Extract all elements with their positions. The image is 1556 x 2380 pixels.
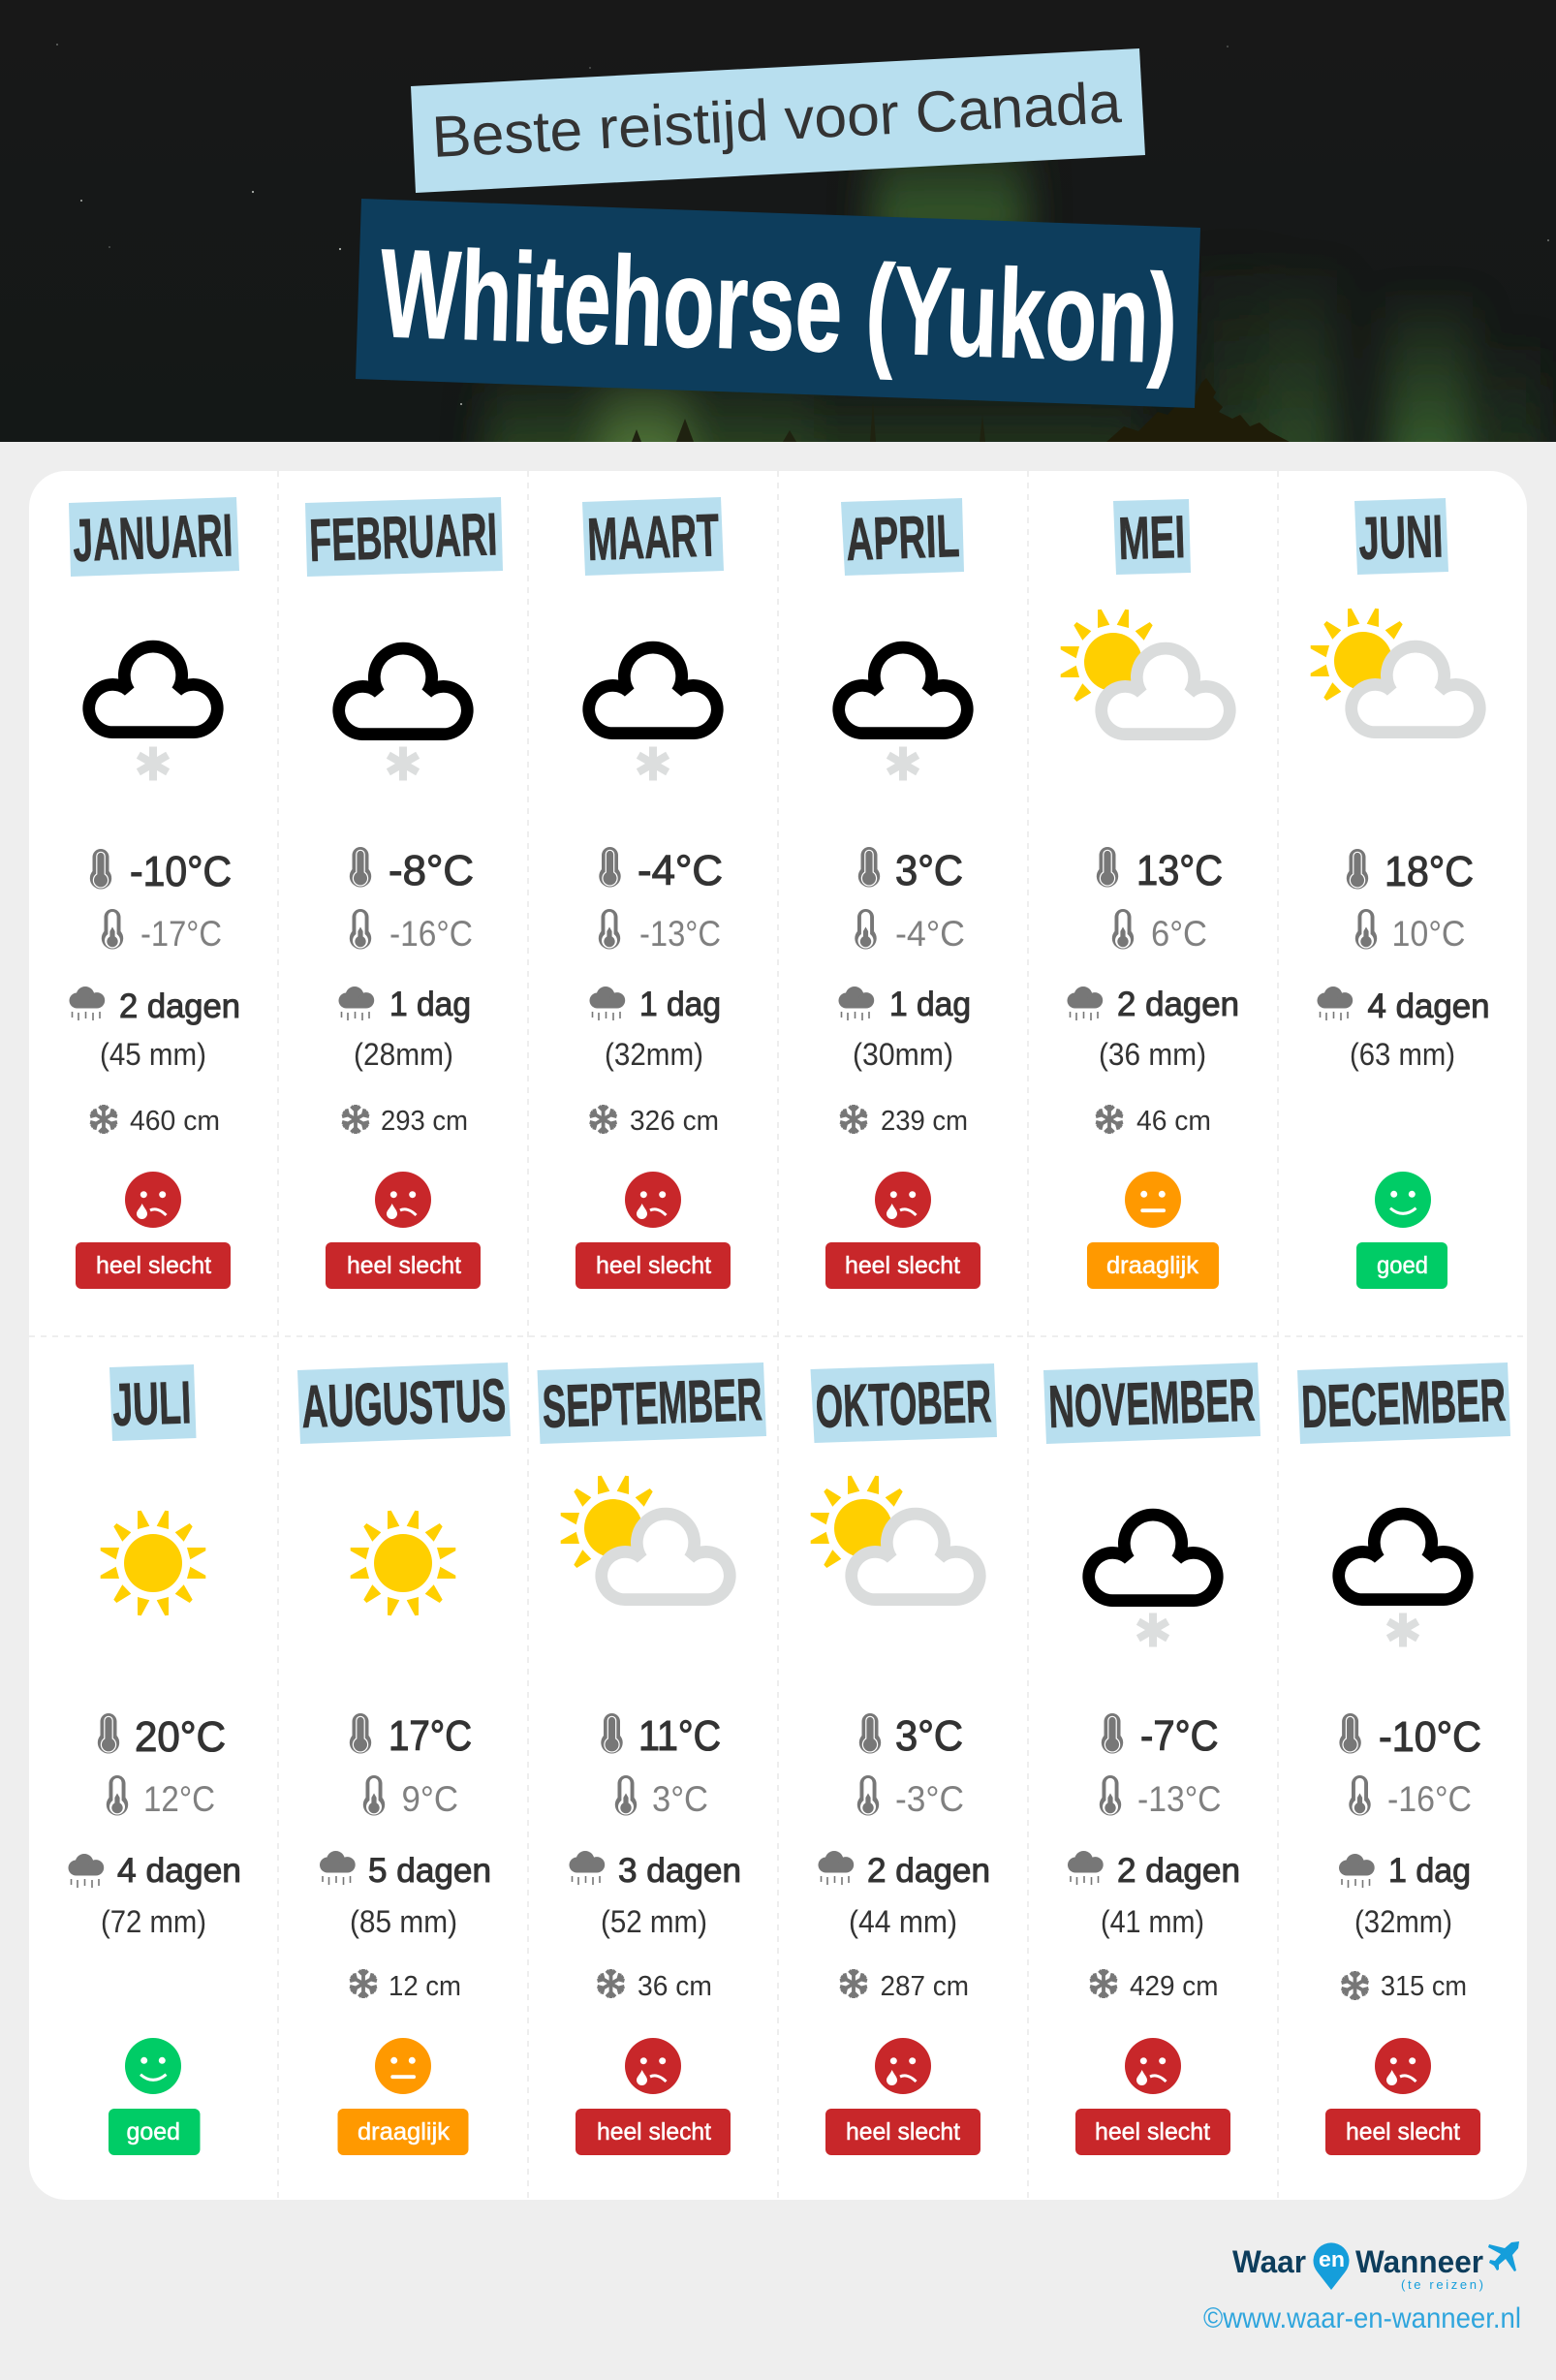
high temperature bbox=[858, 847, 963, 894]
rain days bbox=[339, 986, 471, 1023]
icon: sad face bbox=[125, 1172, 181, 1228]
snowfall: 315 cm bbox=[1381, 1971, 1467, 2002]
rainfall amount: (32mm) bbox=[605, 1037, 703, 1072]
rating badge bbox=[576, 1242, 731, 1289]
icon: sad face bbox=[375, 1172, 431, 1228]
panel: augustus bbox=[297, 1362, 511, 2155]
icon: neutral face bbox=[375, 2038, 431, 2094]
rating badge bbox=[1325, 2109, 1480, 2155]
rainfall amount: (41 mm) bbox=[1101, 1904, 1204, 1939]
rating badge: heel slecht bbox=[846, 2118, 960, 2145]
low temperature: -4°C bbox=[895, 914, 965, 954]
rain days bbox=[1318, 986, 1490, 1025]
rain days: 1 dag bbox=[639, 986, 721, 1023]
low temperature: 10°C bbox=[1391, 914, 1465, 954]
subtitle banner: Beste reistijd voor Canada bbox=[430, 70, 1123, 170]
high temperature: -10°C bbox=[1379, 1713, 1481, 1761]
icon: sun behind cloud bbox=[561, 1476, 730, 1600]
month label: FEBRUARI bbox=[308, 501, 498, 575]
icon: sun bbox=[101, 1511, 205, 1615]
low temperature bbox=[102, 909, 222, 954]
panel: mei bbox=[1061, 499, 1239, 1289]
high temperature: 20°C bbox=[135, 1713, 226, 1761]
panel: juni bbox=[1311, 498, 1490, 1289]
month label: SEPTEMBER bbox=[542, 1366, 763, 1441]
rating badge: draaglijk bbox=[358, 2118, 451, 2145]
panel: maart bbox=[576, 497, 731, 1289]
low temperature bbox=[363, 1775, 458, 1819]
high temperature bbox=[98, 1713, 226, 1761]
title banner: Whitehorse (Yukon) bbox=[378, 222, 1179, 390]
source url: ©www.waar-en-wanneer.nl bbox=[1203, 2302, 1521, 2334]
icon: sad face bbox=[625, 1172, 681, 1228]
rating badge bbox=[109, 2109, 200, 2155]
rainfall amount: (63 mm) bbox=[1350, 1037, 1455, 1072]
rain days: 1 dag bbox=[1388, 1852, 1471, 1890]
snowfall: 460 cm bbox=[130, 1106, 220, 1137]
snowfall bbox=[1095, 1105, 1211, 1137]
low temperature: -16°C bbox=[1387, 1779, 1472, 1819]
month label bbox=[109, 1364, 196, 1441]
month label: MAART bbox=[586, 502, 720, 574]
icon: happy face bbox=[1375, 1172, 1431, 1228]
rain days: 2 dagen bbox=[1117, 1852, 1240, 1890]
rain days: 2 dagen bbox=[119, 987, 240, 1025]
logo: Waar en Wanneer: Waar bbox=[1232, 2244, 1306, 2279]
rainfall amount: (30mm) bbox=[853, 1037, 953, 1072]
high temperature: 3°C bbox=[895, 1712, 963, 1760]
rain days bbox=[818, 1851, 990, 1890]
snowfall bbox=[1340, 1971, 1467, 2002]
rating badge bbox=[576, 2109, 731, 2155]
panel: december bbox=[1297, 1362, 1510, 2155]
month label bbox=[297, 1362, 511, 1444]
rain days bbox=[320, 1851, 491, 1890]
month label bbox=[305, 497, 503, 577]
snowfall: 12 cm bbox=[389, 1971, 461, 2002]
high temperature bbox=[350, 1712, 472, 1760]
icon: sun behind cloud bbox=[1311, 609, 1479, 733]
low temperature: -3°C bbox=[895, 1779, 964, 1819]
month label bbox=[810, 1363, 997, 1443]
low temperature bbox=[107, 1775, 215, 1819]
panel: april bbox=[825, 498, 980, 1289]
high temperature bbox=[1097, 847, 1223, 894]
rating badge bbox=[1356, 1242, 1447, 1289]
low temperature: 3°C bbox=[652, 1779, 708, 1819]
rating badge: heel slecht bbox=[845, 1252, 960, 1279]
rain days: 3 dagen bbox=[618, 1852, 741, 1890]
icon: happy face bbox=[125, 2038, 181, 2094]
month label bbox=[1113, 499, 1191, 575]
logo: Waar en Wanneer: (te reizen) bbox=[1401, 2277, 1483, 2292]
icon: sad face bbox=[875, 2038, 931, 2094]
icon: snow cloud bbox=[1089, 1515, 1217, 1647]
low temperature bbox=[350, 909, 473, 954]
rain days: 1 dag bbox=[389, 986, 471, 1023]
rating badge bbox=[1075, 2109, 1230, 2155]
rating badge: goed bbox=[126, 2118, 180, 2145]
snowfall bbox=[596, 1969, 712, 2002]
rating badge: heel slecht bbox=[1095, 2118, 1210, 2145]
rain days: 4 dagen bbox=[1368, 987, 1490, 1025]
rating badge: draaglijk bbox=[1106, 1252, 1199, 1279]
high temperature bbox=[601, 1712, 721, 1760]
snowfall: 46 cm bbox=[1136, 1106, 1211, 1137]
rainfall amount: (72 mm) bbox=[101, 1904, 206, 1939]
low temperature bbox=[857, 1775, 964, 1819]
panel: oktober bbox=[810, 1363, 997, 2155]
rating badge bbox=[825, 1242, 980, 1289]
rain days bbox=[839, 986, 971, 1023]
rainfall amount: (44 mm) bbox=[849, 1904, 957, 1939]
month label: JANUARI bbox=[72, 502, 233, 575]
snowfall: 429 cm bbox=[1130, 1971, 1219, 2002]
logo: Waar en Wanneer: Wanneer bbox=[1355, 2244, 1483, 2279]
rainfall amount: (28mm) bbox=[354, 1037, 453, 1072]
panel: september bbox=[537, 1362, 766, 2155]
high temperature: -4°C bbox=[638, 847, 723, 894]
subtitle banner bbox=[411, 48, 1145, 193]
panel: november bbox=[1043, 1362, 1260, 2155]
icon: sad face bbox=[1125, 2038, 1181, 2094]
title banner bbox=[356, 199, 1200, 408]
rain days: 5 dagen bbox=[368, 1852, 491, 1890]
rating badge: heel slecht bbox=[1346, 2118, 1460, 2145]
icon: sun behind cloud bbox=[811, 1476, 980, 1600]
snowfall bbox=[89, 1105, 220, 1137]
low temperature: -16°C bbox=[389, 914, 473, 954]
month label bbox=[537, 1362, 766, 1444]
icon: snow cloud bbox=[339, 648, 467, 781]
icon: snow cloud bbox=[1339, 1514, 1467, 1647]
snowfall: 287 cm bbox=[880, 1971, 969, 2002]
rating badge bbox=[825, 2109, 980, 2155]
high temperature: 18°C bbox=[1385, 848, 1474, 895]
high temperature: -7°C bbox=[1140, 1712, 1219, 1760]
rain days bbox=[1068, 1851, 1240, 1890]
snowfall: 36 cm bbox=[638, 1971, 712, 2002]
high temperature bbox=[350, 847, 474, 894]
month label: APRIL bbox=[845, 503, 960, 574]
icon: neutral face bbox=[1125, 1172, 1181, 1228]
month label: OKTOBER bbox=[815, 1368, 992, 1441]
low temperature bbox=[615, 1775, 708, 1819]
rating badge bbox=[1087, 1242, 1219, 1289]
rating badge: heel slecht bbox=[596, 1252, 711, 1279]
month label: NOVEMBER bbox=[1047, 1367, 1256, 1441]
month label bbox=[582, 497, 724, 576]
rain days bbox=[1339, 1852, 1471, 1890]
rain days: 2 dagen bbox=[1117, 986, 1239, 1023]
rainfall amount: (36 mm) bbox=[1099, 1037, 1206, 1072]
low temperature: 9°C bbox=[401, 1779, 458, 1819]
month label bbox=[1043, 1362, 1260, 1444]
rating badge bbox=[337, 2109, 469, 2155]
icon: sad face bbox=[875, 1172, 931, 1228]
low temperature bbox=[599, 909, 721, 954]
rating badge: heel slecht bbox=[597, 2118, 711, 2145]
rain days: 2 dagen bbox=[867, 1852, 990, 1890]
month label: JUNI bbox=[1357, 503, 1444, 573]
low temperature bbox=[855, 909, 965, 954]
rainfall amount: (85 mm) bbox=[350, 1904, 457, 1939]
high temperature bbox=[859, 1712, 963, 1760]
low temperature: 6°C bbox=[1151, 914, 1207, 954]
snowfall bbox=[349, 1969, 461, 2002]
snowfall bbox=[839, 1105, 968, 1137]
high temperature: 13°C bbox=[1136, 847, 1223, 894]
high temperature bbox=[1339, 1713, 1481, 1761]
panel: juli bbox=[68, 1364, 241, 2155]
low temperature: -13°C bbox=[639, 914, 721, 954]
snowfall: 239 cm bbox=[881, 1106, 968, 1137]
rain days: 4 dagen bbox=[117, 1852, 241, 1890]
high temperature: -10°C bbox=[130, 848, 232, 895]
logo: Waar en Wanneer bbox=[1232, 2241, 1519, 2292]
rain days bbox=[70, 986, 240, 1025]
panel: januari bbox=[69, 497, 240, 1289]
high temperature: 3°C bbox=[895, 847, 963, 894]
rating badge: goed bbox=[1377, 1252, 1428, 1279]
panel: februari bbox=[305, 497, 503, 1289]
rating badge bbox=[76, 1242, 231, 1289]
logo: Waar en Wanneer: en bbox=[1319, 2247, 1345, 2271]
month label: MEI bbox=[1117, 504, 1186, 573]
snowfall bbox=[839, 1969, 969, 2002]
calendar card bbox=[29, 471, 1527, 2200]
low temperature bbox=[1112, 909, 1207, 954]
high temperature: 17°C bbox=[389, 1712, 472, 1760]
icon: sad face bbox=[625, 2038, 681, 2094]
high temperature bbox=[599, 847, 723, 894]
month label bbox=[841, 498, 964, 576]
rain days bbox=[589, 986, 721, 1023]
low temperature bbox=[1355, 909, 1465, 954]
high temperature bbox=[90, 848, 232, 895]
rain days bbox=[570, 1851, 741, 1890]
icon: snow cloud bbox=[589, 647, 717, 781]
header photo: northern lights bbox=[0, 0, 1556, 465]
rating badge: heel slecht bbox=[96, 1252, 211, 1279]
high temperature bbox=[1347, 848, 1474, 895]
month label: AUGUSTUS bbox=[300, 1367, 507, 1441]
rating badge bbox=[326, 1242, 481, 1289]
rainfall amount: (45 mm) bbox=[100, 1037, 206, 1072]
icon: snow cloud bbox=[839, 647, 967, 781]
icon: sad face bbox=[1375, 2038, 1431, 2094]
high temperature: -8°C bbox=[389, 847, 474, 894]
high temperature: 11°C bbox=[638, 1712, 721, 1760]
low temperature bbox=[1100, 1775, 1221, 1819]
snowfall bbox=[1089, 1969, 1219, 2002]
rain days: 1 dag bbox=[889, 986, 971, 1023]
snowfall: 326 cm bbox=[630, 1106, 719, 1137]
month label bbox=[1354, 498, 1448, 575]
snowfall bbox=[588, 1105, 719, 1137]
rainfall amount: (52 mm) bbox=[601, 1904, 707, 1939]
low temperature: -17°C bbox=[140, 914, 222, 954]
low temperature bbox=[1349, 1775, 1472, 1819]
icon: sun bbox=[351, 1511, 455, 1615]
snowfall: 293 cm bbox=[381, 1106, 468, 1137]
rating badge: heel slecht bbox=[347, 1252, 461, 1279]
snowfall bbox=[341, 1105, 468, 1137]
icon: snow cloud bbox=[89, 646, 217, 781]
rainfall amount: (32mm) bbox=[1354, 1904, 1452, 1939]
icon: sun behind cloud bbox=[1061, 610, 1229, 735]
low temperature: -13°C bbox=[1137, 1779, 1221, 1819]
month label bbox=[69, 497, 239, 577]
high temperature bbox=[1102, 1712, 1219, 1760]
month label: JULI bbox=[111, 1369, 192, 1439]
low temperature: 12°C bbox=[143, 1779, 215, 1819]
